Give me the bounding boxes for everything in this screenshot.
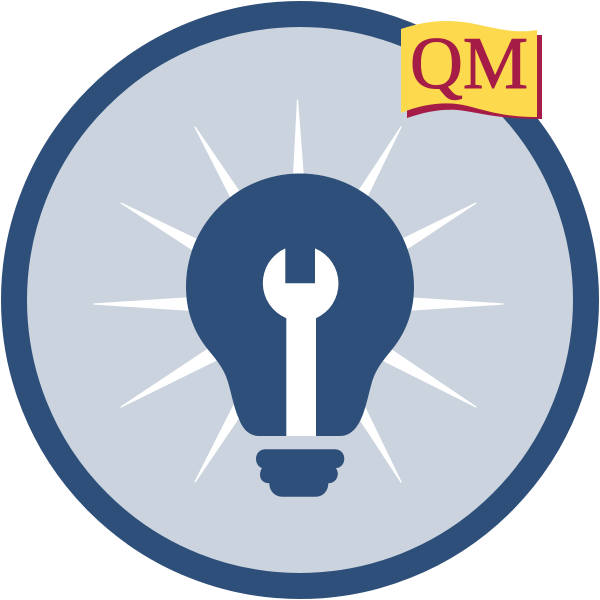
icon: bulb base [256, 449, 344, 497]
logo text: QM [410, 23, 528, 105]
flag body [401, 21, 537, 117]
QM logo flag [401, 21, 542, 119]
light rays [94, 100, 503, 482]
flag shadow [407, 35, 542, 119]
icon: light bulb [186, 174, 414, 436]
icon: wrench [263, 248, 338, 436]
